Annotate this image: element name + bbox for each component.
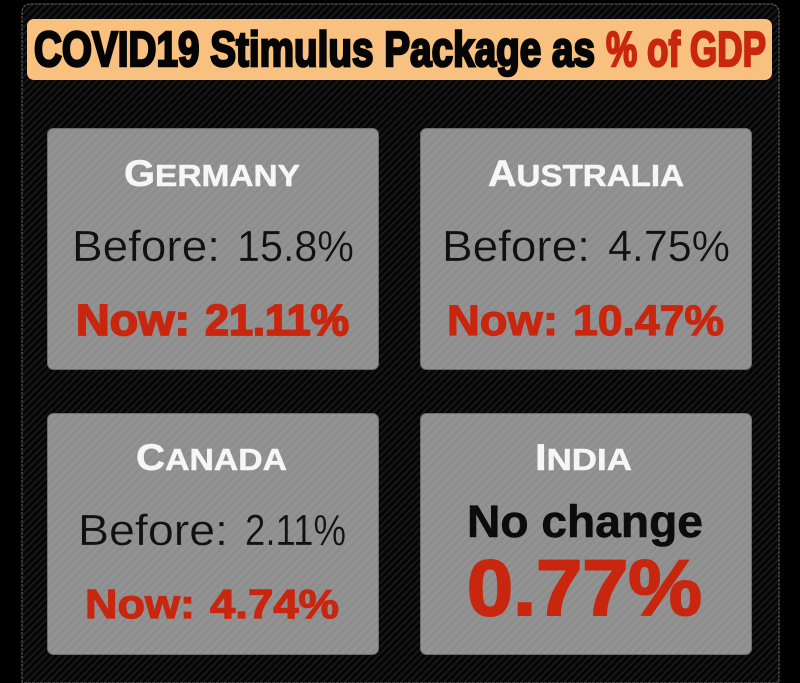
before value: Australia: 4.75% bbox=[608, 222, 730, 271]
title banner bbox=[27, 19, 772, 80]
panel: India bbox=[420, 414, 752, 654]
title: COVID19 Stimulus Package as bbox=[34, 23, 595, 77]
country name: Germany: GERMANY bbox=[124, 153, 300, 194]
current value: Canada: Now: bbox=[85, 581, 195, 627]
current value: Australia bbox=[447, 297, 724, 345]
country name: India: INDIA bbox=[535, 437, 632, 478]
current value: Australia: Now: bbox=[447, 297, 558, 345]
current value: Germany: 21.11% bbox=[205, 296, 349, 345]
before value: Germany bbox=[72, 222, 354, 271]
panel: Canada bbox=[48, 414, 378, 654]
before value: Germany: Before: bbox=[72, 222, 220, 271]
before value: Canada: 2.11% bbox=[245, 506, 346, 555]
current value: Australia: 10.47% bbox=[573, 297, 724, 345]
no change label: No change bbox=[467, 496, 703, 547]
current value: Canada bbox=[85, 581, 339, 627]
panel: Australia bbox=[420, 128, 752, 370]
before value: Australia bbox=[442, 222, 730, 271]
before value: Australia: Before: bbox=[442, 222, 590, 271]
panel: Germany bbox=[48, 128, 378, 370]
country name: Canada: CANADA bbox=[136, 437, 287, 478]
before value: Germany: 15.8% bbox=[237, 222, 354, 271]
before value: Canada bbox=[78, 506, 346, 555]
current value: India: 0.77% bbox=[467, 543, 702, 632]
current value: Germany bbox=[76, 296, 349, 345]
current value: Canada: 4.74% bbox=[210, 581, 339, 627]
country name: Australia: AUSTRALIA bbox=[488, 153, 684, 194]
before value: Canada: Before: bbox=[78, 506, 228, 555]
current value: Germany: Now: bbox=[76, 296, 190, 345]
